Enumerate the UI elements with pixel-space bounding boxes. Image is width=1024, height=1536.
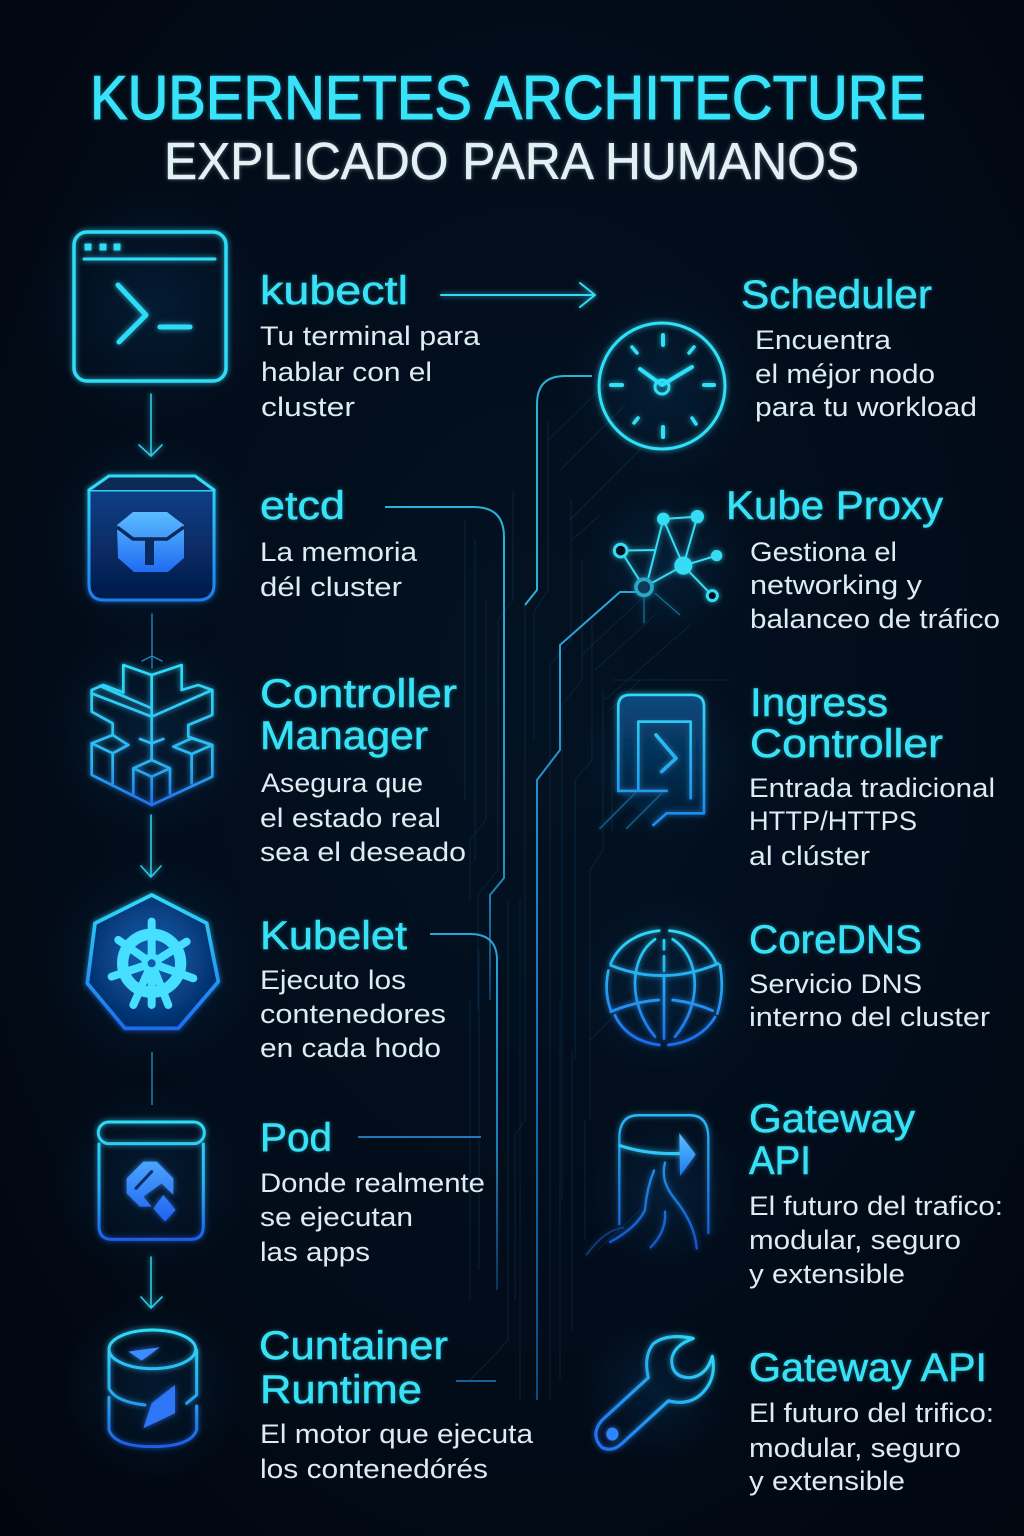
description: y extensible bbox=[749, 1259, 905, 1289]
title bbox=[90, 64, 926, 191]
description: interno del cluster bbox=[749, 1002, 990, 1032]
panel: kubectl bbox=[74, 232, 481, 422]
description: Encuentra bbox=[755, 325, 892, 355]
description: contenedores bbox=[260, 999, 446, 1029]
description: Entrada tradicional bbox=[749, 773, 995, 803]
panel: controller manager bbox=[92, 665, 466, 867]
description: balanceo de tráfico bbox=[750, 604, 1000, 634]
icon: isometric blocks bbox=[92, 665, 212, 805]
heading: CoreDNS bbox=[749, 918, 922, 962]
connector lines bbox=[358, 283, 640, 1400]
icon: terminal bbox=[74, 232, 226, 381]
description bbox=[749, 773, 995, 871]
description: los contenedórés bbox=[260, 1454, 488, 1484]
description bbox=[260, 1168, 485, 1267]
description: Tu terminal para bbox=[260, 321, 481, 351]
icon: network graph bbox=[614, 511, 721, 623]
title line 2: EXPLICADO PARA HUMANOS bbox=[164, 133, 859, 191]
heading: Controller bbox=[260, 672, 457, 716]
description: las apps bbox=[260, 1237, 370, 1267]
heading: kubectl bbox=[260, 269, 408, 313]
description bbox=[750, 537, 1000, 634]
description: networking y bbox=[750, 570, 923, 600]
heading bbox=[749, 1097, 915, 1183]
panel: coredns bbox=[607, 918, 990, 1045]
connector: kubelet trace bbox=[430, 934, 497, 1290]
heading: Runtime bbox=[260, 1368, 422, 1412]
arrow: kubectl to scheduler bbox=[441, 283, 595, 307]
description: Gestiona el bbox=[750, 537, 897, 567]
background circuit traces bbox=[465, 380, 730, 1400]
panel: etcd bbox=[89, 476, 418, 602]
description: modular, seguro bbox=[749, 1433, 961, 1463]
icon: clock bbox=[599, 323, 725, 449]
heading: Scheduler bbox=[741, 273, 932, 317]
description bbox=[260, 537, 418, 602]
icon: inner cube bbox=[117, 512, 184, 572]
description: Asegura que bbox=[261, 768, 423, 798]
icon: gateway routes bbox=[587, 1115, 708, 1255]
heading: Manager bbox=[260, 714, 428, 758]
description: Ejecuto los bbox=[260, 965, 406, 995]
description bbox=[260, 965, 446, 1063]
description bbox=[260, 1419, 534, 1484]
heading: Gateway API bbox=[749, 1346, 987, 1390]
heading: Kubelet bbox=[260, 914, 407, 958]
description: cluster bbox=[261, 392, 355, 422]
description: Donde realmente bbox=[260, 1168, 485, 1198]
panel: ingress controller bbox=[600, 681, 995, 871]
description: al clúster bbox=[749, 841, 870, 871]
description: y extensible bbox=[749, 1466, 905, 1496]
icon: doorway bbox=[600, 695, 704, 828]
connector: container runtime line bbox=[456, 1380, 496, 1382]
icon: database box bbox=[89, 476, 214, 600]
panel: pod bbox=[98, 1116, 485, 1267]
heading: Cuntainer bbox=[259, 1324, 448, 1368]
arrow: kubelet to pod bbox=[151, 1052, 153, 1105]
description: hablar con el bbox=[261, 357, 432, 387]
icon: globe bbox=[607, 931, 722, 1045]
connector: etcd trace bbox=[385, 507, 504, 1000]
arrow: etcd to controller manager bbox=[142, 614, 162, 668]
description: Servicio DNS bbox=[749, 969, 922, 999]
description: se ejecutan bbox=[260, 1202, 413, 1232]
icon: helm wheel bbox=[87, 895, 218, 1028]
description: sea el deseado bbox=[260, 837, 466, 867]
heading: Controller bbox=[750, 722, 943, 766]
panel: kubelet bbox=[87, 895, 446, 1063]
connector: kube proxy trace bbox=[537, 592, 640, 1400]
description: en cada hodo bbox=[260, 1033, 441, 1063]
description bbox=[755, 325, 977, 422]
arrow: controller manager to kubelet bbox=[141, 815, 161, 877]
panel: container runtime bbox=[109, 1324, 534, 1484]
heading: Kube Proxy bbox=[726, 484, 943, 528]
heading bbox=[259, 1324, 448, 1412]
heading bbox=[260, 672, 457, 758]
title line 1: KUBERNETES ARCHITECTURE bbox=[90, 64, 926, 133]
connector: pod line bbox=[358, 1136, 481, 1138]
description: modular, seguro bbox=[749, 1225, 961, 1255]
icon: pod container bbox=[98, 1122, 204, 1239]
icon: wrench bbox=[596, 1337, 713, 1449]
description: el estado real bbox=[260, 803, 441, 833]
heading: Pod bbox=[260, 1116, 332, 1160]
panel: kube proxy bbox=[614, 484, 1000, 634]
description: El futuro del trafico: bbox=[749, 1191, 1003, 1221]
panel: gateway api wrench bbox=[596, 1337, 994, 1496]
description: HTTP/HTTPS bbox=[749, 806, 917, 836]
description bbox=[749, 1398, 994, 1496]
description: El motor que ejecuta bbox=[260, 1419, 534, 1449]
description: para tu workload bbox=[755, 392, 977, 422]
heading: API bbox=[749, 1139, 811, 1183]
heading: Gateway bbox=[749, 1097, 915, 1141]
heading: etcd bbox=[260, 484, 345, 528]
description bbox=[749, 1191, 1003, 1289]
description: dél cluster bbox=[260, 572, 402, 602]
arrow: pod to container runtime bbox=[141, 1257, 162, 1308]
description: El futuro del trifico: bbox=[749, 1398, 994, 1428]
connector: scheduler trace bbox=[525, 376, 592, 605]
heading bbox=[750, 681, 943, 766]
description bbox=[749, 969, 990, 1032]
description bbox=[260, 768, 466, 867]
arrow: kubectl to etcd bbox=[139, 394, 162, 456]
description: el méjor nodo bbox=[755, 359, 935, 389]
heading: Ingress bbox=[750, 681, 888, 725]
panel: gateway api bbox=[587, 1097, 1003, 1289]
icon: cylinder bbox=[109, 1330, 197, 1447]
description: La memoria bbox=[260, 537, 418, 567]
description bbox=[260, 321, 481, 422]
panel: scheduler bbox=[599, 273, 977, 449]
